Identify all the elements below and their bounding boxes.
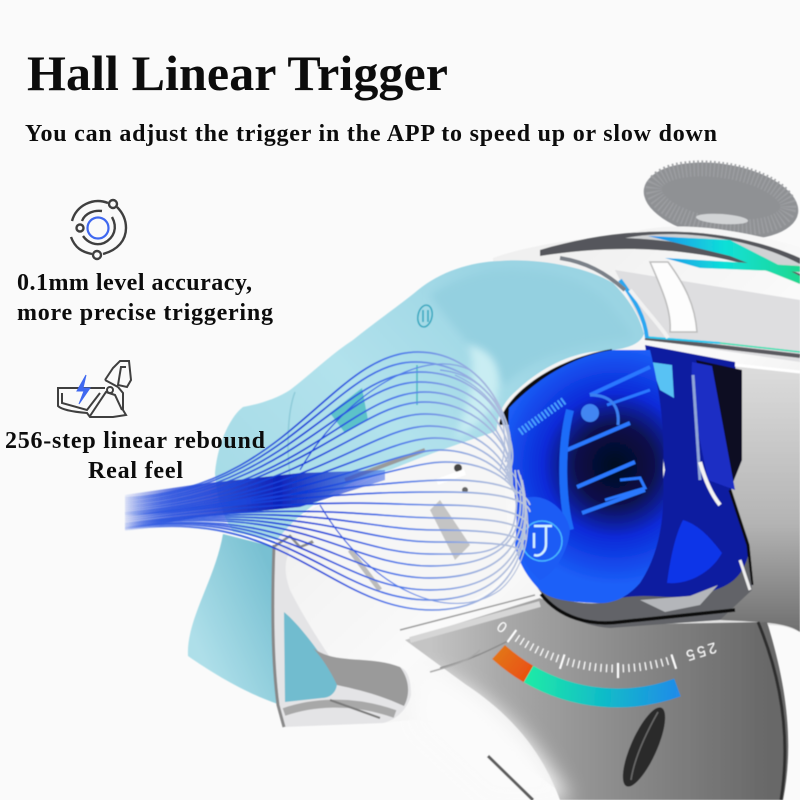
title: Hall Linear Trigger: [27, 45, 448, 101]
lower trigger blue grip: [188, 534, 278, 704]
gauge: tick scale: [508, 630, 676, 678]
lower body edge lines: [400, 595, 785, 800]
lens seam line: [560, 258, 800, 372]
top dark band with cyan light: [540, 231, 800, 284]
upper trigger blue grip: [215, 260, 644, 540]
chrome controller body: [275, 226, 800, 800]
feature text: accuracy: more precise triggering: [17, 300, 273, 326]
icon: trigger rebound: [58, 361, 131, 417]
thumbstick knob: [638, 152, 800, 250]
lower right grey panel: [690, 360, 800, 632]
small grip logo: [416, 304, 434, 328]
feature text: rebound: [5, 428, 266, 484]
blue lens chamber: [509, 350, 664, 603]
gauge label: 0: 0: [494, 617, 511, 636]
white fold highlight: [410, 670, 570, 800]
bright logo plate: [516, 497, 570, 580]
feature text: accuracy: 0.1mm level accuracy,: [17, 270, 252, 296]
feature text: rebound: 256-step linear rebound: [5, 428, 266, 454]
product: transparent controller trigger illustration: [125, 152, 800, 800]
clear trigger tip: [273, 530, 411, 727]
magnetic streamlines converging into hall sensor: [125, 352, 530, 610]
hinge highlight: [650, 262, 697, 332]
upper right chrome panel: [615, 270, 800, 362]
black gap above the lens: [499, 349, 612, 425]
gauge: coloured travel arc: [498, 652, 678, 698]
internal trigger mechanism: [300, 430, 510, 606]
lens outer shards: [590, 345, 752, 622]
side slot: [615, 702, 673, 792]
solid stream core: [125, 470, 385, 530]
feature text: rebound: Real feel: [88, 458, 183, 484]
lens logo: [522, 521, 562, 561]
lens ribs: [520, 367, 650, 530]
feature text: accuracy: [17, 270, 273, 326]
lens pin: [581, 404, 599, 422]
gauge label: 255: 255: [681, 638, 719, 665]
lower grey diagonal surface: [405, 598, 788, 800]
subtitle: You can adjust the trigger in the APP to speed up or slow down: [25, 121, 717, 147]
lens chrome rim: [536, 556, 752, 628]
icon: orbit accuracy: [71, 200, 126, 259]
